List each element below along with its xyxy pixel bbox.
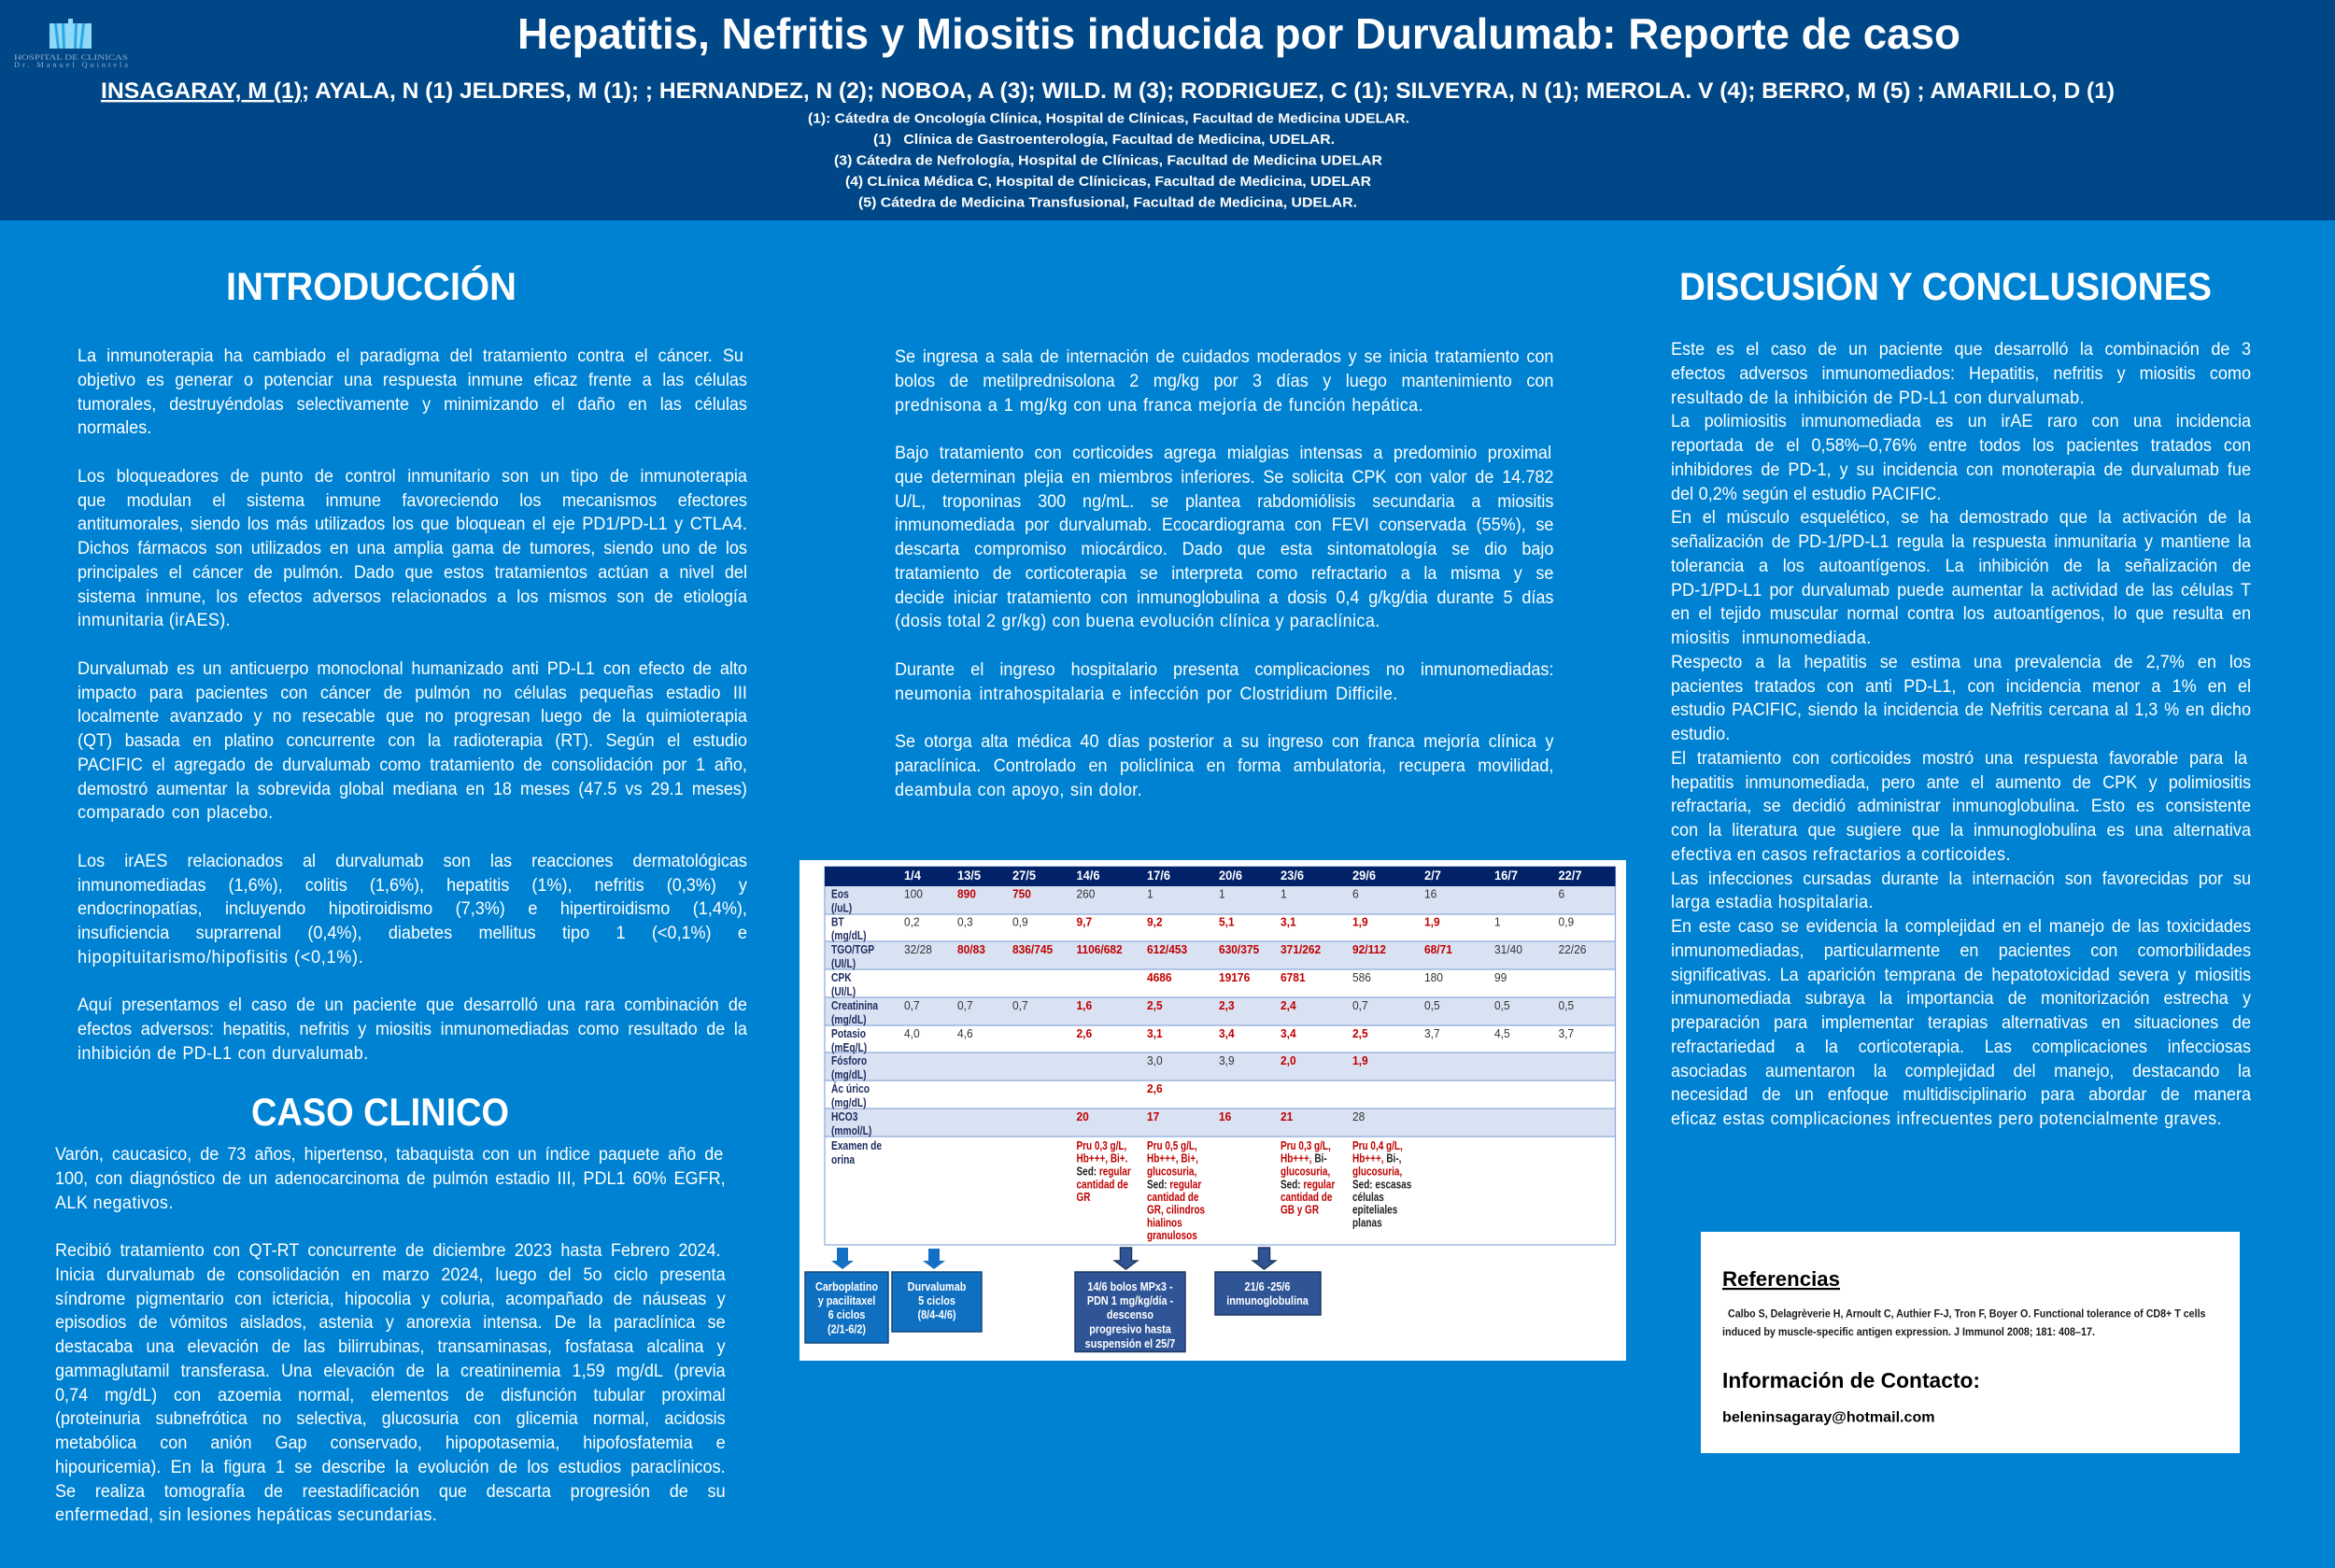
row: Creatinina: 0,5 xyxy=(1424,999,1440,1012)
text: caso clinico column xyxy=(55,1145,726,1525)
row: BT: 9,7 xyxy=(1076,915,1092,929)
row: Eos: 1 xyxy=(1281,887,1287,901)
text: referencia bibliográfica: Calbo S, Delagrèverie H, Arnoult C, Authier F-J, Tron F, Boyer O. Functional tolerance of CD8+ T cells xyxy=(1728,1309,2206,1321)
paragraph: tratamiento y paraclínica: destacaba una elevación de las bilirrubinas, transaminasas, fosfatasa alcalina y xyxy=(55,1337,726,1357)
paragraph: tratamiento con corticoides: hepatitis inmunomediada, pero ante el aumento de CPK y polimiositis xyxy=(1671,773,2251,792)
paragraph: inmunoterapia: tumorales, destruyéndolas selectivamente y minimizando el daño en las células xyxy=(78,394,747,415)
row: HCO3: HCO3 xyxy=(831,1111,857,1123)
paragraph: infecciones: larga estadia hospitalaria. xyxy=(1671,893,1874,912)
row: Creatinina: 0,7 xyxy=(1352,999,1368,1012)
paragraph: tratamiento y paraclínica: enfermedad, sin lesiones hepáticas secundarias. xyxy=(55,1505,438,1525)
row: TGO/TGP: 612/453 xyxy=(1147,943,1187,956)
row: Fósforo xyxy=(831,1054,1368,1081)
paragraph: durvalumab: impacto para pacientes con cáncer de pulmón no células pequeñas estadio III xyxy=(78,684,747,702)
paragraph: músculo esquelético: En el músculo esquelético, se ha demostrado que la activación de la xyxy=(1671,508,2251,528)
paragraph: ingreso y corticoides: Se ingresa a sala de internación de cuidados moderados y se inicia tratamiento con xyxy=(895,347,1553,367)
heading: caso clinico: CASO CLINICO xyxy=(251,1090,509,1134)
text: referencia bibliográfica: induced by muscle-specific antigen expression. J Immunol 2008; 181: 408–17. xyxy=(1722,1327,2095,1338)
authors: INSAGARAY, M (1) xyxy=(101,78,302,104)
row: Eos: 890 xyxy=(957,887,976,901)
row: TGO/TGP: 31/40 xyxy=(1494,943,1522,956)
table header dates: 29/6 xyxy=(1352,869,1376,883)
row: CPK xyxy=(831,971,1507,998)
paragraph: conclusión: inmunomediadas, particularmente en pacientes con comorbilidades xyxy=(1671,941,2251,961)
paragraph: tratamiento con corticoides: El tratamiento con corticoides mostró una respuesta favorable para la xyxy=(1671,749,2247,769)
paragraph: presentación del caso: Aquí presentamos el caso de un paciente que desarrolló una rara combinación de xyxy=(78,996,747,1015)
paragraph: bloqueadores de punto de control: que modulan el sistema inmune favoreciendo los mecanismos efectores xyxy=(78,491,747,510)
row: Potasio: 3,4 xyxy=(1219,1027,1235,1040)
box: carboplatino y paclitaxel: 6 ciclos xyxy=(828,1308,866,1321)
row: BT: 1,9 xyxy=(1352,915,1368,929)
row: Eos: 750 xyxy=(1012,887,1031,901)
row: Potasio: 2,6 xyxy=(1076,1027,1092,1040)
row: examen de orina: Hb+++, Bi- xyxy=(1281,1153,1327,1165)
paragraph: irAES de durvalumab: endocrinopatías, incluyendo hipotiroidismo (7,3%) e hipertiroidismo (1,4%), xyxy=(78,899,747,919)
row: Ác úrico xyxy=(831,1082,1163,1109)
table header dates: 22/7 xyxy=(1559,869,1582,883)
row: Potasio: 3,1 xyxy=(1147,1027,1163,1040)
row: Creatinina: 2,4 xyxy=(1281,999,1296,1012)
paragraph: polimiositis: del 0,2% según el estudio PACIFIC. xyxy=(1671,484,1941,504)
box: bolos de metilprednisolona: PDN 1 mg/kg/día - xyxy=(1087,1294,1173,1307)
paragraph: bloqueadores de punto de control: inmunitaria (irAES). xyxy=(78,611,231,630)
table background rows xyxy=(825,867,1616,1245)
affiliations: (1): Cátedra de Oncología Clínica, Hospital de Clínicas, Facultad de Medicina UDELAR. xyxy=(808,110,1409,127)
paragraph: alta médica: Se otorga alta médica 40 días posterior a su ingreso con franca mejoría clínica y xyxy=(895,732,1553,752)
paragraph: antecedentes: 100, con diagnóstico de un adenocarcinoma de pulmón estadio III, PDL1 60% EGFR, xyxy=(55,1169,726,1189)
row: Ác úrico: Ác úrico xyxy=(831,1082,870,1095)
table header dates: 2/7 xyxy=(1424,869,1441,883)
text: correo de contacto: beleninsagaray@hotmail.com xyxy=(1722,1410,1935,1426)
row: HCO3: 16 xyxy=(1219,1110,1231,1123)
paragraph: tratamiento y paraclínica: metabólica con anión Gap conservado, hipopotasemia, hipofosfatemia e xyxy=(55,1434,726,1453)
paragraph: miositis e inmunoglobulina: inmunomediada por durvalumab. Ecocardiograma con FEVI conservada (55%), se xyxy=(895,516,1553,535)
row: Eos: 100 xyxy=(904,887,923,901)
row: examen de orina: Sed: regular xyxy=(1281,1180,1336,1192)
paragraph: miositis e inmunoglobulina: decide iniciar tratamiento con inmunoglobulina a dosis 0,4 g/kg/dia durante 5 días xyxy=(895,588,1553,607)
row: examen de orina: GR xyxy=(1077,1192,1090,1204)
paragraph: tratamiento y paraclínica: Recibió tratamiento con QT-RT concurrente de diciembre 2023 hasta Febrero 2024. xyxy=(55,1241,721,1261)
box: carboplatino y paclitaxel: (2/1-6/2) xyxy=(828,1323,866,1336)
row: examen de orina: planas xyxy=(1352,1218,1382,1230)
row: examen de orina: Sed: escasas xyxy=(1352,1180,1411,1192)
row: Eos: 6 xyxy=(1352,887,1359,901)
row: examen de orina: glucosuria, xyxy=(1352,1166,1402,1179)
paragraph: miositis e inmunoglobulina: (dosis total 2 gr/kg) con buena evolución clínica y paraclínica. xyxy=(895,612,1380,631)
paragraph: hepatitis y nefritis xyxy=(1671,653,2251,744)
box: inmunoglobulina xyxy=(1215,1272,1321,1315)
paragraph: conclusión: asociadas aumentaron la complejidad del manejo, destacando la xyxy=(1671,1061,2251,1081)
affiliations: (4) CLínica Médica C, Hospital de Clínicicas, Facultad de Medicina, UDELAR xyxy=(845,174,1371,190)
paragraph: tratamiento y paraclínica: hipouricemia). En la figura 1 se describe la evolución de los estudios paraclínicos. xyxy=(55,1458,726,1477)
table header dates: 13/5 xyxy=(957,869,982,883)
paragraph: irAES de durvalumab: hipopituitarismo/hipofisitis (<0,1%). xyxy=(78,948,363,968)
paragraph: tratamiento y paraclínica: Se realiza tomografía de reestadificación que descarta progresión de su xyxy=(55,1481,726,1502)
paragraph: combinación de efectos: efectos adversos inmunomediados: Hepatitis, nefritis y miositis como xyxy=(1671,364,2251,384)
row: Potasio xyxy=(831,1027,1574,1054)
row: examen de orina: Sed: regular xyxy=(1077,1166,1131,1179)
paragraph: alta médica xyxy=(895,732,1554,799)
row: BT: 0,9 xyxy=(1012,915,1028,929)
paragraph: infecciones xyxy=(1671,869,2251,912)
affiliations: (5) Cátedra de Medicina Transfusional, Facultad de Medicina, UDELAR. xyxy=(858,194,1357,211)
paragraph: durvalumab: comparado con placebo. xyxy=(78,803,274,823)
paragraph: durvalumab: localmente avanzado y no resecable que no progresan luego de la quimioterapia xyxy=(78,707,747,727)
paragraph: miositis e inmunoglobulina: Bajo tratamiento con corticoides agrega mialgias intensas a predominio proximal xyxy=(895,444,1551,463)
box: durvalumab: 5 ciclos xyxy=(918,1294,955,1307)
text: referencia bibliográfica xyxy=(1722,1309,2206,1338)
paragraph: miositis e inmunoglobulina xyxy=(895,444,1553,631)
row: Creatinina: 2,5 xyxy=(1147,999,1163,1012)
paragraph: inmunoterapia: objetivo es generar o potenciar una respuesta inmune eficaz frente a las células xyxy=(78,371,747,390)
row: Eos: Eos xyxy=(831,889,849,901)
row: Creatinina: 0,7 xyxy=(904,999,920,1012)
row: BT xyxy=(831,915,1574,942)
panel: referencias y contacto xyxy=(1701,1232,2240,1453)
box: bolos de metilprednisolona: progresivo hasta xyxy=(1089,1323,1171,1336)
box: durvalumab: Durvalumab xyxy=(908,1280,966,1293)
row: examen de orina: Pru 0,3 g/L, xyxy=(1281,1140,1331,1152)
paragraph: ingreso y corticoides: bolos de metilprednisolona 2 mg/kg por 3 días y luego mantenimiento con xyxy=(895,372,1553,391)
paragraph: conclusión: preparación para implementar terapias alternativas en situaciones de xyxy=(1671,1013,2251,1033)
box: bolos de metilprednisolona: descenso xyxy=(1107,1308,1153,1321)
row: HCO3: 17 xyxy=(1147,1110,1159,1123)
box: inmunoglobulina: inmunoglobulina xyxy=(1226,1294,1309,1307)
paragraph: tratamiento con corticoides: con la literatura que sugiere que la inmunoglobulina es una alternativa xyxy=(1671,821,2251,841)
paragraph: músculo esquelético xyxy=(1671,508,2251,648)
table header dates: 27/5 xyxy=(1012,869,1037,883)
row: BT: 0,9 xyxy=(1559,915,1574,929)
title: Hepatitis, Nefritis y Miositis inducida por Durvalumab: Reporte de caso xyxy=(517,9,1960,58)
row: Potasio: 2,5 xyxy=(1352,1027,1368,1040)
paragraph: hepatitis y nefritis: pacientes tratados con anti PD-L1, con incidencia menor a 1% en el xyxy=(1671,676,2251,697)
row: BT: (mg/dL) xyxy=(831,930,867,942)
table header dates: 1/4 xyxy=(904,869,921,883)
row: Fósforo: Fósforo xyxy=(831,1055,867,1067)
text: discusión column xyxy=(1671,340,2251,1129)
row: CPK: 6781 xyxy=(1281,971,1306,984)
row: Potasio: 3,7 xyxy=(1559,1027,1574,1040)
paragraph: durvalumab: (QT) basada en platino concurrente con la radioterapia (RT). Según el estudio xyxy=(78,731,747,751)
paragraph: antecedentes: ALK negativos. xyxy=(55,1194,174,1212)
row: Eos: 6 xyxy=(1559,887,1564,901)
row: TGO/TGP xyxy=(831,943,1586,970)
paragraph: hepatitis y nefritis: estudio. xyxy=(1671,725,1730,744)
row: Fósforo: 2,0 xyxy=(1281,1054,1296,1067)
row: HCO3: 28 xyxy=(1352,1110,1365,1123)
paragraph: conclusión: inmunomediada subraya la importancia de monitorización estrecha y xyxy=(1671,989,2251,1009)
row: CPK: 19176 xyxy=(1219,971,1250,984)
row: examen de orina: Hb+++, Bi-, xyxy=(1352,1153,1401,1165)
paragraph: tratamiento y paraclínica xyxy=(55,1241,726,1525)
box: durvalumab xyxy=(892,1272,982,1332)
paragraph: músculo esquelético: miositis inmunomediada. xyxy=(1671,629,1872,648)
paragraph: tratamiento y paraclínica: Inicia durvalumab de consolidación en marzo 2024, luego del 5o ciclo presenta xyxy=(55,1265,726,1285)
text: introducción column xyxy=(78,346,747,1064)
paragraph: inmunoterapia: La inmunoterapia ha cambiado el paradigma del tratamiento contra el cáncer. Su xyxy=(78,346,743,366)
paragraph: inmunoterapia xyxy=(78,346,747,438)
paragraph: durvalumab xyxy=(78,659,747,823)
paragraph: miositis e inmunoglobulina: que determinan plejia en miembros inferiores. Se solicita CPK con valor de 14.782 xyxy=(895,468,1553,487)
paragraph: complicaciones: neumonia intrahospitalaria e infección por Clostridium Difficile. xyxy=(895,684,1398,704)
row: Eos: (/uL) xyxy=(831,903,852,915)
paragraph: irAES de durvalumab: inmunomediadas (1,6%), colitis (1,6%), hepatitis (1%), nefritis (0,3%) y xyxy=(78,876,747,895)
text: evolución column xyxy=(895,347,1554,799)
row: TGO/TGP: 371/262 xyxy=(1281,943,1321,956)
row: examen de orina: Hb+++, Bi+, xyxy=(1147,1153,1198,1165)
affiliations: (3) Cátedra de Nefrología, Hospital de Clínicas, Facultad de Medicina UDELAR xyxy=(834,153,1382,168)
row: HCO3: 20 xyxy=(1076,1110,1089,1123)
paragraph: alta médica: paraclínica. Controlado en policlínica en forma ambulatoria, recupera movilidad, xyxy=(895,756,1553,776)
paragraph: tratamiento y paraclínica: episodios de vómitos aislados, astenia y anorexia intensa. De la paraclínica se xyxy=(55,1313,726,1333)
row: CPK: 99 xyxy=(1494,971,1507,984)
row: BT: 0,3 xyxy=(957,915,973,929)
heading: información de contacto: Información de Contacto: xyxy=(1722,1368,1980,1392)
paragraph: polimiositis xyxy=(1671,412,2251,504)
row: TGO/TGP: 630/375 xyxy=(1219,943,1259,956)
header banner xyxy=(0,0,2335,220)
paragraph: presentación del caso xyxy=(78,996,747,1064)
box: carboplatino y paclitaxel: y pacilitaxel xyxy=(818,1294,875,1307)
box: bolos de metilprednisolona: suspensión el 25/7 xyxy=(1085,1337,1175,1350)
row: Eos: 260 xyxy=(1076,887,1095,901)
row: examen de orina: epiteliales xyxy=(1352,1205,1397,1217)
row: BT: 1,9 xyxy=(1424,915,1440,929)
row: BT: 3,1 xyxy=(1281,915,1296,929)
paragraph: hepatitis y nefritis: estudio PACIFIC, siendo la incidencia de Nefritis cercana al 1,3 % en dicho xyxy=(1671,700,2251,720)
paragraph: durvalumab: PACIFIC el agregado de durvalumab como tratamiento de consolidación por 1 año, xyxy=(78,756,747,775)
row: examen de orina: Hb+++, Bi+. xyxy=(1077,1153,1127,1165)
paragraph: antecedentes: Varón, caucasico, de 73 años, hipertenso, tabaquista con un índice paquete año de xyxy=(55,1145,724,1165)
paragraph: miositis e inmunoglobulina: U/L, troponinas 300 ng/mL. se plantea rabdomiólisis secundaria a miositis xyxy=(895,491,1553,512)
row: Potasio: 3,7 xyxy=(1424,1027,1440,1040)
row: HCO3 xyxy=(831,1110,1365,1137)
table header dates: 20/6 xyxy=(1219,869,1242,883)
paragraph: antecedentes xyxy=(55,1145,726,1212)
row: Potasio: 4,5 xyxy=(1494,1027,1510,1040)
paragraph: presentación del caso: inhibición de PD-L1 con durvalumab. xyxy=(78,1044,369,1064)
row: examen de orina: glucosuria, xyxy=(1147,1166,1196,1179)
row: Potasio: 4,0 xyxy=(904,1027,920,1040)
paragraph: conclusión: refractariedad a la corticoterapia. Las complicaciones infecciosas xyxy=(1671,1038,2251,1057)
row: examen de orina: GR, cilindros xyxy=(1147,1205,1205,1217)
row: TGO/TGP: 32/28 xyxy=(904,943,932,956)
row: examen de orina: Sed: regular xyxy=(1147,1180,1202,1192)
row: examen de orina: GB y GR xyxy=(1281,1205,1319,1217)
row: TGO/TGP: 80/83 xyxy=(957,943,985,956)
row: TGO/TGP: 68/71 xyxy=(1424,943,1452,956)
paragraph: tratamiento con corticoides: efectiva en casos refractarios a corticoides. xyxy=(1671,845,2011,865)
paragraph: durvalumab: Durvalumab es un anticuerpo monoclonal humanizado anti PD-L1 con efecto de alto xyxy=(78,659,747,679)
row: BT: 9,2 xyxy=(1147,915,1163,929)
arrow: bolos MP xyxy=(1115,1248,1138,1269)
row: TGO/TGP: TGO/TGP xyxy=(831,944,874,956)
box: inmunoglobulina: 21/6 -25/6 xyxy=(1245,1280,1291,1293)
row: Creatinina: (mg/dL) xyxy=(831,1014,867,1026)
paragraph: bloqueadores de punto de control: sistema inmune, los efectos adversos relacionados a los mismos son de etiología xyxy=(78,586,747,607)
table header dates: 23/6 xyxy=(1281,869,1304,883)
row: examen de orina: orina xyxy=(831,1154,856,1166)
box: durvalumab: (8/4-4/6) xyxy=(917,1308,956,1321)
paragraph: tratamiento y paraclínica: (proteinuria subnefrótica no selectiva, glucosuria con glicemia normal, acidosis xyxy=(55,1409,726,1429)
paragraph: ingreso y corticoides xyxy=(895,347,1553,415)
paragraph: infecciones: Las infecciones cursadas durante la internación son favorecidas por su xyxy=(1671,869,2251,889)
paragraph: polimiositis: reportada de el 0,58%–0,76% entre todos los pacientes tratados con xyxy=(1671,436,2251,456)
row: CPK: 586 xyxy=(1352,971,1371,984)
paragraph: tratamiento y paraclínica: 0,74 mg/dL) con azoemia normal, elementos de disfunción tubular proximal xyxy=(55,1386,726,1405)
row: examen de orina: glucosuria, xyxy=(1281,1166,1330,1179)
row: TGO/TGP: (UI/L) xyxy=(831,958,856,970)
paragraph: músculo esquelético: en el tejido muscular normal contra los autoantígenos, lo que resulta en xyxy=(1671,604,2251,624)
figure: tabla de evolución paraclínica xyxy=(800,860,1626,1361)
row: Eos: 1 xyxy=(1147,887,1153,901)
row: TGO/TGP: 92/112 xyxy=(1352,943,1386,956)
row: Eos: 1 xyxy=(1219,887,1225,901)
affiliations: (1) Clínica de Gastroenterología, Facultad de Medicina, UDELAR. xyxy=(873,132,1335,148)
row: CPK: 180 xyxy=(1424,971,1443,984)
table header dates xyxy=(904,869,1582,883)
icon: hospital logo: Dr. Manuel Quintela xyxy=(14,60,128,69)
row: Creatinina xyxy=(831,999,1574,1026)
row: BT: 5,1 xyxy=(1219,915,1235,929)
paragraph: alta médica: deambula con apoyo, sin dolor. xyxy=(895,781,1142,799)
row: HCO3: 21 xyxy=(1281,1110,1293,1123)
row: Fósforo: 3,9 xyxy=(1219,1054,1235,1067)
row: examen de orina: cantidad de xyxy=(1147,1192,1198,1204)
paragraph: presentación del caso: efectos adversos: hepatitis, nefritis y miositis inmunomediadas como resultado de la xyxy=(78,1020,747,1039)
row: Potasio: Potasio xyxy=(831,1028,866,1040)
paragraph: músculo esquelético: tolerancia a los autoantígenos. La inhibición de la señalización de xyxy=(1671,557,2251,576)
paragraph: inmunoterapia: normales. xyxy=(78,418,151,438)
row: Creatinina: 2,3 xyxy=(1219,999,1235,1012)
paragraph: conclusión xyxy=(1671,917,2251,1129)
row: examen de orina: Pru 0,3 g/L, xyxy=(1077,1140,1126,1152)
paragraph: conclusión: eficaz estas complicaciones infrecuentes pero potencialmente graves. xyxy=(1671,1109,2222,1129)
row: Fósforo: 3,0 xyxy=(1147,1054,1163,1067)
row: examen de orina: cantidad de xyxy=(1077,1180,1128,1192)
row: CPK: (UI/L) xyxy=(831,986,856,998)
authors: ; AYALA, N (1) JELDRES, M (1); ; HERNANDEZ, N (2); NOBOA, A (3); WILD. M (3); RODRIGUEZ, C (1); SILVEYRA, N (1); MEROLA. V (4); BERRO, M (5) ; AMARILLO, D (1) xyxy=(302,78,2115,104)
paragraph: hepatitis y nefritis: Respecto a la hepatitis se estima una prevalencia de 2,7% en los xyxy=(1671,653,2251,672)
row: Ác úrico: (mg/dL) xyxy=(831,1097,867,1109)
row: Creatinina: 0,5 xyxy=(1494,999,1510,1012)
row: Creatinina: 0,5 xyxy=(1559,999,1574,1012)
paragraph: miositis e inmunoglobulina: tratamiento de corticoterapia se interpreta como refractario a la misma y se xyxy=(895,564,1553,584)
paragraph: conclusión: necesidad de un enfoque multidisciplinario para abordar de manera xyxy=(1671,1085,2251,1105)
paragraph: bloqueadores de punto de control: antitumorales, siendo los más utilizados los que bloquean el eje PD1/PD-L1 y CTLA4. xyxy=(78,515,747,534)
paragraph: músculo esquelético: PD-1/PD-L1 por durvalumab puede aumentar la actividad de las células T xyxy=(1671,581,2251,600)
box: carboplatino y paclitaxel xyxy=(805,1272,888,1343)
paragraph: combinación de efectos: Este es el caso de un paciente que desarrolló la combinación de 3 xyxy=(1671,340,2251,360)
row: Fósforo: (mg/dL) xyxy=(831,1069,867,1081)
paragraph: complicaciones: Durante el ingreso hospitalario presenta complicaciones no inmunomediadas: xyxy=(895,660,1553,680)
paragraph: tratamiento y paraclínica: gammaglutamil transferasa. Una elevación de la creatininemia 1,59 mg/dL (previa xyxy=(55,1362,726,1381)
row: examen de orina: cantidad de xyxy=(1281,1192,1332,1204)
row: CPK: 4686 xyxy=(1147,971,1172,984)
row: TGO/TGP: 836/745 xyxy=(1012,943,1053,956)
paragraph: tratamiento con corticoides xyxy=(1671,749,2251,865)
paragraph: bloqueadores de punto de control xyxy=(78,467,747,630)
affiliations xyxy=(808,110,1409,211)
paragraph: tratamiento y paraclínica: síndrome pigmentario con ictericia, hipocolia y coluria, acompañado de náuseas y xyxy=(55,1289,726,1309)
row: TGO/TGP: 1106/682 xyxy=(1076,943,1123,956)
row: BT: BT xyxy=(831,917,844,929)
row: examen de orina xyxy=(831,1140,1411,1242)
row: Eos xyxy=(831,887,1564,915)
paragraph: bloqueadores de punto de control: Los bloqueadores de punto de control inmunitario son un tipo de inmunoterapia xyxy=(78,467,747,487)
box: bolos de metilprednisolona xyxy=(1075,1272,1185,1352)
row: Potasio: (mEq/L) xyxy=(831,1042,867,1054)
row: examen de orina: Examen de xyxy=(831,1140,882,1152)
arrow: inmunoglobulina xyxy=(1253,1248,1276,1269)
heading: referencias: Referencias xyxy=(1722,1267,1840,1291)
paragraph: combinación de efectos: resultado de la inhibición de PD-L1 con durvalumab. xyxy=(1671,388,2085,407)
paragraph: polimiositis: inhibidores de PD-1, y su incidencia con monoterapia de durvalumab fue xyxy=(1671,460,2251,480)
row: TGO/TGP: 22/26 xyxy=(1559,943,1586,956)
heading: introducción: INTRODUCCIÓN xyxy=(226,263,517,308)
arrow: carboplatino xyxy=(831,1248,854,1269)
paragraph: irAES de durvalumab: Los irAES relacionados al durvalumab son las reacciones dermatológicas xyxy=(78,852,747,871)
table header dates: 14/6 xyxy=(1076,869,1100,883)
paragraph: ingreso y corticoides: prednisona a 1 mg/kg con una franca mejoría de función hepática. xyxy=(895,396,1423,415)
paragraph: durvalumab: demostró aumentar la sobrevida global mediana en 18 meses (47.5 vs 29.1 meses) xyxy=(78,779,747,799)
icon: hospital logo xyxy=(14,19,128,69)
table header dates: 16/7 xyxy=(1494,869,1518,883)
row: Creatinina: 1,6 xyxy=(1076,999,1092,1012)
row: HCO3: (mmol/L) xyxy=(831,1125,871,1137)
icon: hospital logo: HOSPITAL DE CLINICAS xyxy=(14,52,128,62)
table header dates: 17/6 xyxy=(1147,869,1170,883)
paragraph: complicaciones xyxy=(895,660,1553,704)
row: Creatinina: 0,7 xyxy=(1012,999,1028,1012)
row: CPK: CPK xyxy=(831,972,852,984)
box: carboplatino y paclitaxel: Carboplatino xyxy=(815,1280,878,1293)
row: examen de orina: Pru 0,5 g/L, xyxy=(1147,1140,1197,1152)
row: Potasio: 4,6 xyxy=(957,1027,973,1040)
row: BT: 1 xyxy=(1494,915,1501,929)
row: Ác úrico: 2,6 xyxy=(1147,1082,1163,1095)
paragraph: combinación de efectos xyxy=(1671,340,2251,407)
paragraph: bloqueadores de punto de control: principales el cáncer de pulmón. Dado que estos tratamientos actúan a nivel del xyxy=(78,563,747,583)
row: Eos: 16 xyxy=(1424,887,1436,901)
row: Creatinina: Creatinina xyxy=(831,1000,879,1012)
paragraph: irAES de durvalumab xyxy=(78,852,747,968)
arrow: durvalumab xyxy=(923,1249,945,1269)
row: Fósforo: 1,9 xyxy=(1352,1054,1368,1067)
paragraph: tratamiento con corticoides: refractaria, se decidió administrar inmunoglobulina. Esto es consistente xyxy=(1671,797,2251,816)
row: examen de orina: células xyxy=(1352,1192,1384,1204)
row: examen de orina: hialinos xyxy=(1147,1218,1182,1230)
paragraph: bloqueadores de punto de control: Dichos fármacos son utilizados en una amplia gama de tumores, siendo uno de los xyxy=(78,539,747,558)
row: examen de orina: Pru 0,4 g/L, xyxy=(1352,1140,1403,1152)
row: BT: 0,2 xyxy=(904,915,920,929)
paragraph: músculo esquelético: señalización de PD-1/PD-L1 regula la respuesta inmunitaria y mantiene la xyxy=(1671,532,2251,552)
paragraph: miositis e inmunoglobulina: descarta compromiso miocárdico. Dado que esta sintomatología se dio bajo xyxy=(895,540,1553,559)
paragraph: irAES de durvalumab: insuficiencia suprarrenal (0,4%), diabetes mellitus tipo 1 (<0,1%) e xyxy=(78,924,747,943)
row: Potasio: 3,4 xyxy=(1281,1027,1296,1040)
paragraph: conclusión: En este caso se evidencia la complejidad en el manejo de las toxicidades xyxy=(1671,917,2251,937)
paragraph: polimiositis: La polimiositis inmunomediada es un irAE raro con una incidencia xyxy=(1671,412,2251,431)
row: Creatinina: 0,7 xyxy=(957,999,973,1012)
row: examen de orina: granulosos xyxy=(1147,1230,1197,1242)
box: bolos de metilprednisolona: 14/6 bolos MPx3 - xyxy=(1087,1280,1173,1293)
paragraph: conclusión: significativas. La aparición temprana de hepatotoxicidad severa y miositis xyxy=(1671,966,2251,984)
heading: discusión y conclusiones: DISCUSIÓN Y CONCLUSIONES xyxy=(1679,263,2212,308)
